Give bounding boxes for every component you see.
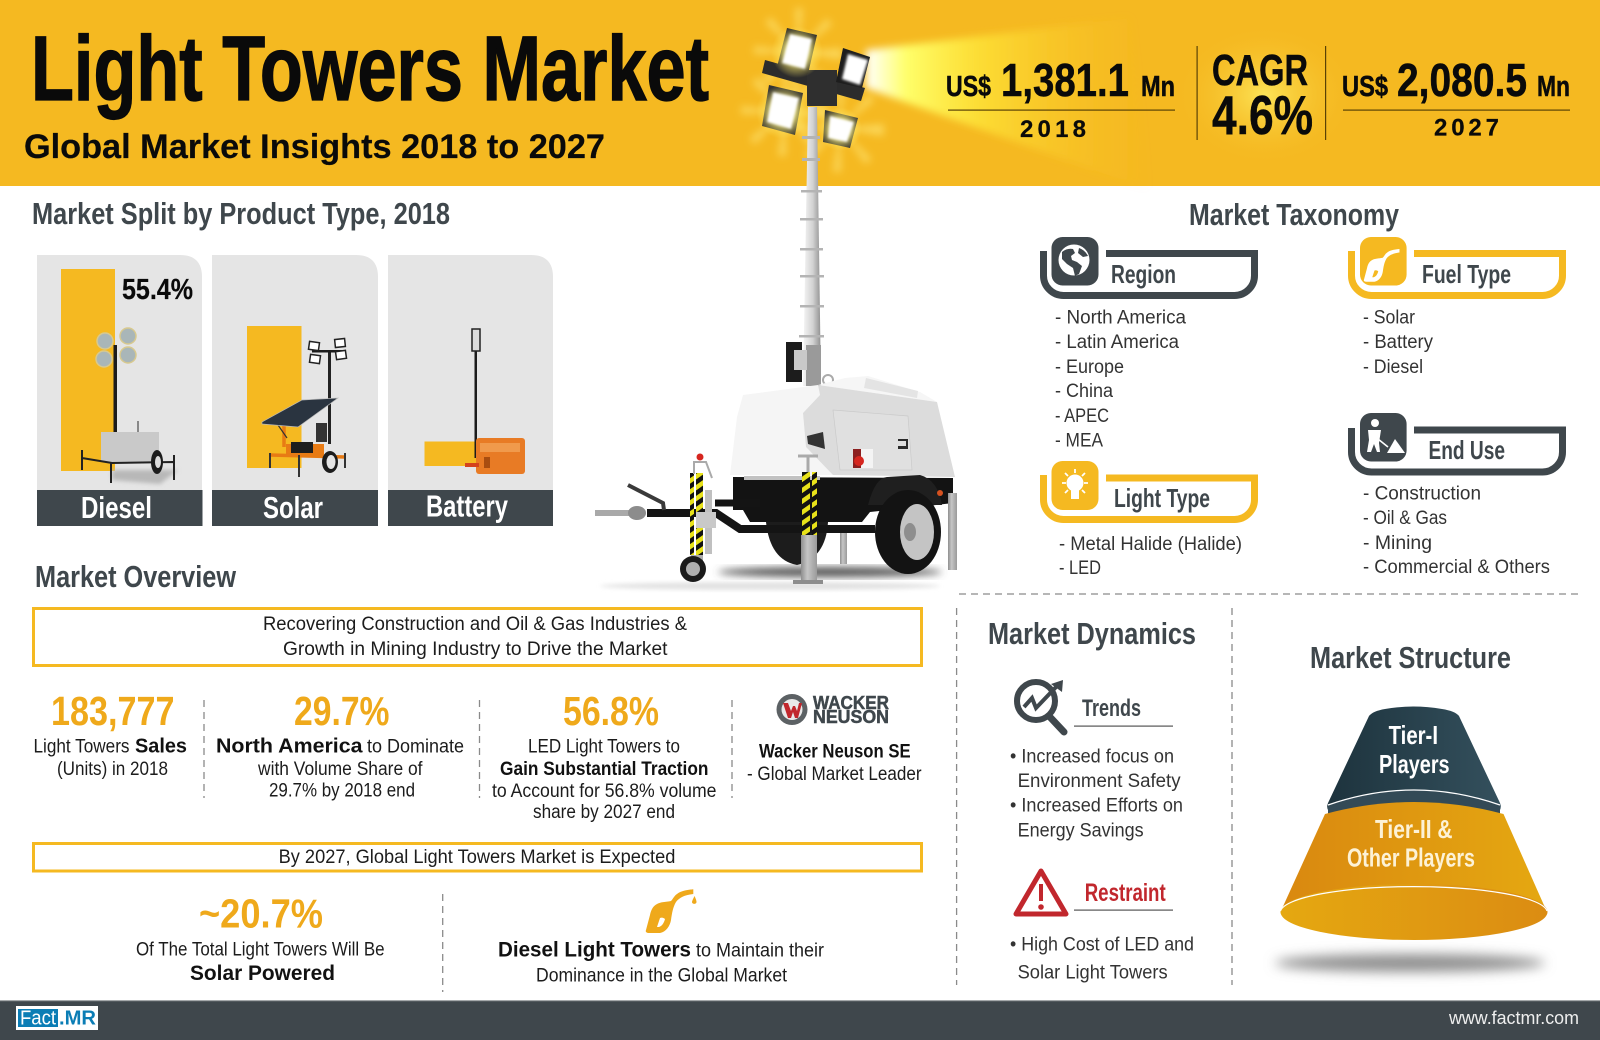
stat: CAGR: [1196, 46, 1326, 146]
icon: battery tower: [465, 329, 525, 474]
cone shadow: [1275, 954, 1545, 972]
tier I: Players: [1379, 749, 1450, 779]
icon: fuel nozzle: [646, 889, 696, 933]
lamp: top right: [836, 48, 870, 88]
list: light types: - LED: [1059, 558, 1101, 579]
list: end uses: - Construction: [1363, 484, 1481, 504]
lamp crossbar: [762, 60, 865, 101]
tier II: Tier-II &: [1375, 814, 1452, 844]
bar: diesel: [61, 269, 115, 471]
stat: north america share: North America: [216, 736, 363, 758]
list: fuel types: - Diesel: [1363, 357, 1423, 378]
lamp: bottom right: [818, 107, 862, 151]
title: Light Towers Market: [31, 18, 709, 120]
market leader: - Global Market Leader: [747, 764, 922, 785]
stat: diesel dominance: to Maintain their: [696, 941, 825, 962]
panel: diesel: [37, 255, 202, 526]
logo: Fact.MR: .MR: [59, 1008, 97, 1030]
list: light types: [1059, 534, 1242, 579]
list: fuel types: [1363, 308, 1433, 378]
taxonomy: fuel type: [1351, 237, 1563, 378]
icon: fuel nozzle: [1360, 237, 1407, 286]
illustration: main light tower: [595, 26, 957, 590]
lamp: top left: [771, 26, 823, 78]
list: restraints: • High Cost of LED and: [1010, 935, 1194, 956]
icon: globe: [1052, 237, 1098, 286]
list: regions: - Europe: [1055, 357, 1124, 378]
stat: LED share: 56.8%: [563, 688, 659, 734]
dynamics: trends: [1010, 680, 1183, 842]
panel: solar: [212, 255, 378, 526]
stat: 2027 market value: 2,080.5: [1397, 54, 1527, 106]
stat: solar powered: [136, 891, 385, 985]
stat: sales units: Light Towers: [34, 737, 130, 758]
heading: light type: Light Type: [1114, 483, 1210, 513]
list: regions: - Latin America: [1055, 332, 1179, 353]
list: trends: Energy Savings: [1018, 821, 1144, 842]
logo: Fact.MR: [16, 1006, 98, 1030]
taxonomy: end use: [1352, 413, 1562, 578]
callout: market drivers: Growth in Mining Industry to Drive the Market: [283, 639, 668, 660]
stat: 2018 market value: 2018: [1020, 116, 1086, 143]
stat: sales units: Sales: [135, 736, 187, 758]
stat: 2027 market value: [1342, 54, 1570, 142]
list: trends: [1010, 747, 1183, 842]
list: regions: - MEA: [1055, 430, 1103, 452]
header band: [0, 0, 1600, 186]
list: trends: Environment Safety: [1018, 771, 1181, 792]
jockey jack: [680, 454, 716, 582]
tier I: [1327, 706, 1501, 820]
market leader: [747, 693, 922, 785]
stat: 2027 market value: US$: [1342, 71, 1388, 103]
stat: LED share: Gain Substantial Traction: [500, 759, 708, 780]
callout: 2027 expectation: By 2027, Global Light Towers Market is Expected: [279, 847, 675, 868]
icon: light bulb: [1052, 461, 1098, 510]
stat: 2018 market value: [946, 54, 1175, 143]
stat: LED share: LED Light Towers to: [528, 737, 680, 758]
heading: market dynamics: Market Dynamics: [988, 616, 1196, 651]
list: regions: - APEC: [1055, 406, 1109, 427]
mast: [803, 107, 821, 386]
icon: magnifier with chart: [1017, 680, 1064, 732]
stat: north america share: 29.7% by 2018 end: [269, 781, 415, 802]
generator housing top: [818, 376, 937, 402]
vent and controls: [807, 432, 825, 449]
list: fuel types: - Solar: [1363, 308, 1416, 328]
front support leg: [793, 456, 823, 584]
stat: solar powered: Solar Powered: [190, 962, 335, 985]
list: end uses: - Commercial & Others: [1363, 557, 1550, 578]
footer: [0, 1000, 1600, 1040]
stat: LED share: [492, 688, 716, 823]
lamp: bottom left: [756, 85, 810, 139]
label: battery: Battery: [426, 488, 509, 524]
light beam: [866, 18, 1355, 190]
icon: solar tower: [262, 338, 347, 477]
value: diesel share: 55.4%: [122, 274, 193, 306]
stat: sales units: 183,777: [51, 688, 174, 734]
bar: battery: [424, 442, 476, 466]
stat: 2027 market value: Mn: [1537, 71, 1570, 103]
stat: north america share: with Volume Share of: [257, 759, 423, 780]
stat: 2027 market value: 2027: [1434, 114, 1499, 142]
ground shadow: [600, 567, 942, 590]
stat: 2018 market value: US$: [946, 71, 991, 103]
callout: 2027 expectation: [34, 844, 922, 871]
heading: market overview: Market Overview: [35, 559, 237, 594]
stat: 2018 market value: Mn: [1141, 71, 1175, 103]
stat: north america share: to Dominate: [367, 737, 464, 758]
list: trends: • Increased focus on: [1010, 747, 1174, 768]
list: restraints: [1010, 935, 1194, 983]
chart: market structure cone: [1275, 706, 1548, 972]
heading: market taxonomy: Market Taxonomy: [1189, 197, 1400, 232]
list: end uses: - Mining: [1363, 533, 1432, 554]
logo: wacker neuson: NEUSON: [813, 707, 889, 727]
heading: fuel type: Fuel Type: [1422, 259, 1511, 289]
heading: region: Region: [1111, 259, 1176, 289]
icon: warning triangle: [1016, 871, 1066, 914]
list: restraints: Solar Light Towers: [1018, 962, 1168, 983]
dynamics: restraint: Restraint: [1085, 879, 1166, 907]
list: regions: - China: [1055, 381, 1113, 402]
stat: LED share: to Account for 56.8% volume: [492, 781, 716, 802]
heading: market split: Market Split by Product Type, 2018: [32, 196, 450, 231]
generator housing right face: [803, 385, 955, 477]
taxonomy: light type: [1043, 461, 1255, 579]
stat: 2018 market value: 1,381.1: [1001, 54, 1129, 106]
tier II: [1280, 802, 1548, 940]
panel: battery: [388, 255, 553, 526]
stat: diesel dominance: [498, 889, 825, 987]
label: solar: Solar: [263, 490, 323, 525]
main wheel: [875, 490, 941, 574]
right support post: [948, 493, 957, 570]
label: diesel: Diesel: [81, 490, 152, 525]
heading: end use: End Use: [1428, 435, 1505, 465]
logo: wacker neuson: [776, 693, 889, 727]
list: fuel types: - Battery: [1363, 332, 1433, 353]
chassis: [733, 477, 953, 522]
icon: diesel tower: [82, 328, 178, 484]
website: www.factmr.com: [1448, 1008, 1579, 1028]
market leader: Wacker Neuson SE: [759, 742, 911, 763]
stat: LED share: share by 2027 end: [533, 802, 675, 823]
stat: sales units: [34, 688, 187, 780]
callout: market drivers: Recovering Construction and Oil & Gas Industries &: [263, 614, 687, 635]
list: light types: - Metal Halide (Halide): [1059, 534, 1242, 555]
list: end uses: - Oil & Gas: [1363, 508, 1447, 529]
tier II: Other Players: [1347, 843, 1475, 873]
tow bar: [647, 513, 875, 529]
stat: solar powered: Of The Total Light Towers Will Be: [136, 940, 385, 961]
list: end uses: [1363, 484, 1550, 578]
stat: CAGR: CAGR: [1212, 46, 1308, 95]
lifting ring: [823, 375, 833, 385]
lamp rays: [763, 30, 862, 150]
logo: wacker neuson: WACKER: [813, 693, 889, 713]
list: regions: [1055, 308, 1186, 452]
callout: market drivers: [34, 608, 922, 666]
list: trends: • Increased Efforts on: [1010, 796, 1183, 817]
icon: worker: [1360, 413, 1407, 462]
heading: market structure: Market Structure: [1310, 640, 1511, 675]
stat: CAGR: 4.6%: [1212, 84, 1313, 146]
taxonomy: region: [1043, 237, 1255, 452]
stat: solar powered: ~20.7%: [199, 891, 323, 937]
tier I: Tier-I: [1389, 720, 1438, 750]
list: regions: - North America: [1055, 308, 1186, 328]
logo: Fact.MR: Fact: [20, 1008, 56, 1030]
rear wheel: [766, 522, 828, 565]
stat: sales units: (Units) in 2018: [57, 759, 168, 780]
bar: solar: [247, 326, 302, 468]
generator housing left face: [730, 385, 833, 475]
stat: diesel dominance: Dominance in the Global Market: [536, 966, 788, 987]
stat: north america share: [216, 688, 464, 802]
dynamics: trends: Trends: [1082, 695, 1141, 722]
stat: diesel dominance: Diesel Light Towers: [498, 939, 691, 962]
subtitle: Global Market Insights 2018 to 2027: [24, 128, 605, 166]
dynamics: restraint: [1010, 871, 1194, 983]
stat: north america share: 29.7%: [294, 688, 390, 734]
